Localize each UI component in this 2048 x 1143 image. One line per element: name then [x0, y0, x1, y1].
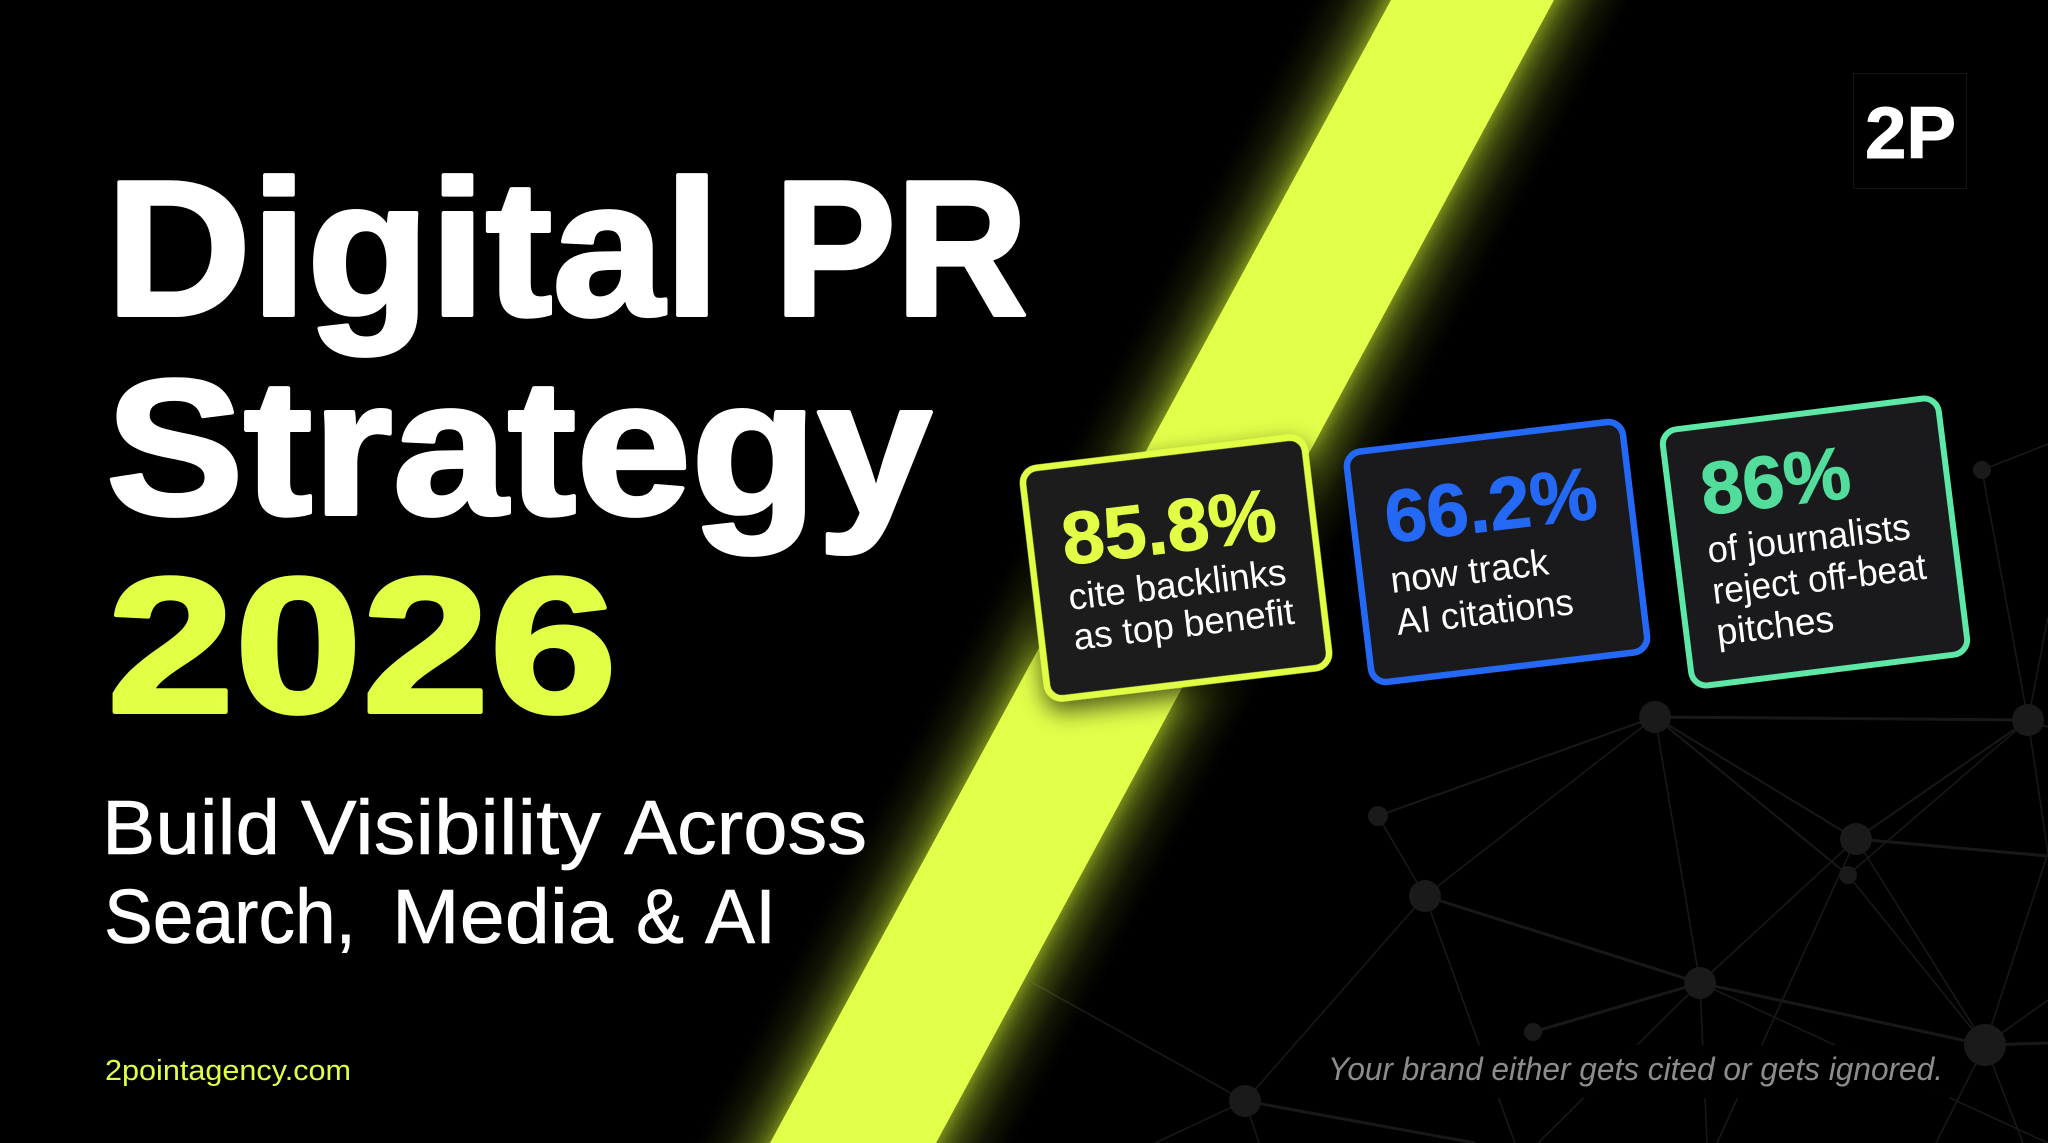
- subtitle: Visibility: [301, 785, 602, 871]
- network graph backdrop: [1033, 444, 2048, 1143]
- card: 85.8%: as top benefit: [1071, 591, 1297, 658]
- card: 86%: [1661, 397, 1969, 687]
- card: 86%: 86%: [1696, 431, 1855, 531]
- card: 86%: pitches: [1714, 598, 1836, 653]
- card: 85.8%: [1021, 436, 1331, 700]
- card: 66.2%: now track: [1388, 541, 1551, 601]
- subtitle: [102, 785, 867, 960]
- website url: 2pointagency.com: [105, 1055, 351, 1087]
- title: PR: [774, 140, 1028, 356]
- card: 86%: reject off-beat: [1710, 546, 1929, 612]
- subtitle: Build: [102, 785, 280, 871]
- card: 66.2%: AI citations: [1394, 581, 1576, 643]
- title: Digital: [106, 140, 720, 356]
- tagline: Your brand either gets cited or gets ignored.: [1328, 1051, 1943, 1087]
- title: 2026: [107, 537, 617, 753]
- logo: 2P: 2P: [1865, 93, 1956, 174]
- tagline backing band: [1328, 1045, 1950, 1098]
- logo: 2P: [1854, 74, 1966, 188]
- subtitle: Across: [624, 785, 867, 871]
- subtitle: &: [636, 874, 684, 960]
- title: Strategy: [106, 339, 932, 555]
- network graph nodes: [1229, 461, 2044, 1117]
- title: [106, 140, 1028, 753]
- subtitle: Media: [392, 874, 613, 960]
- card: 66.2%: [1345, 420, 1649, 684]
- card: 85.8%: 85.8%: [1057, 473, 1280, 581]
- card: 66.2%: 66.2%: [1380, 451, 1601, 559]
- card: 86%: of journalists: [1705, 506, 1913, 571]
- subtitle: Search,: [104, 874, 356, 960]
- subtitle: AI: [705, 874, 776, 960]
- card: 85.8%: cite backlinks: [1066, 551, 1288, 618]
